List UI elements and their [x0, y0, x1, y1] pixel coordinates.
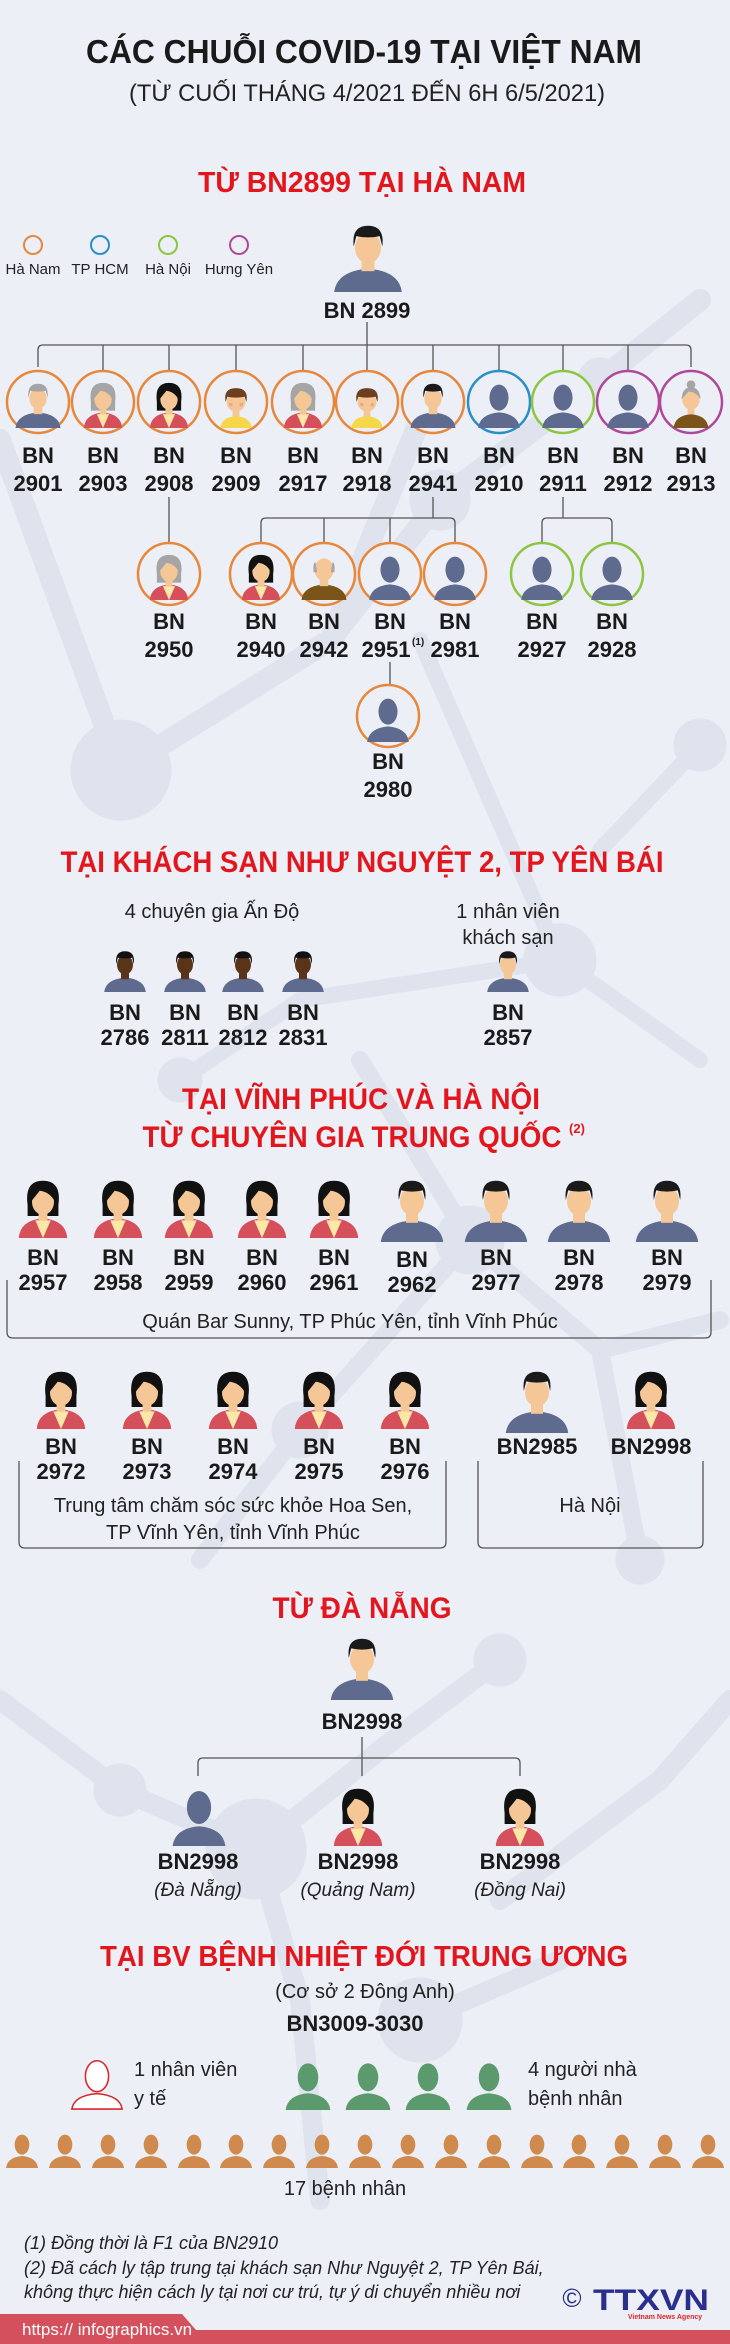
footer bar [0, 2314, 730, 2344]
group: 4 Indian experts: BN [287, 1000, 319, 1025]
row 2 patients: BN [596, 609, 628, 634]
group: Bar Sunny: 2961 [310, 1270, 358, 1295]
row 2 patients: BN [245, 609, 277, 634]
row 2 patients: 2981 [431, 637, 479, 662]
Da Nang contacts: BN2998 [480, 1849, 560, 1874]
logo: TTXVN: TTXVN [593, 2284, 709, 2317]
group: Hoa Sen health center: BN [45, 1434, 77, 1459]
patient relatives [286, 2059, 638, 2110]
row 1 patients: 2917 [279, 471, 327, 496]
row 2 patients: 2940 [237, 637, 285, 662]
group: Bar Sunny: BN [27, 1245, 59, 1270]
group: Bar Sunny: BN [318, 1245, 350, 1270]
group: 4 Indian experts: BN [169, 1000, 201, 1025]
footnotes [24, 2233, 544, 2302]
group: Hoa Sen health center: TP Vĩnh Yên, tỉnh Vĩnh Phúc [106, 1522, 360, 1544]
group: Bar Sunny: 2958 [94, 1270, 142, 1295]
tree lines section 4 [198, 1737, 520, 1776]
group: Bar Sunny: BN [651, 1245, 683, 1270]
group: hotel staff: BN [492, 1000, 524, 1025]
title: CÁC CHUỖI COVID-19 TẠI VIỆT NAM [86, 33, 642, 70]
row 2 patients: BN [439, 609, 471, 634]
Da Nang contacts: BN2998 [158, 1849, 238, 1874]
row 1 patients: BN [547, 443, 579, 468]
logo: TTXVN [562, 2283, 709, 2321]
logo: TTXVN: Vietnam News Agency [628, 2314, 702, 2321]
17 patients [6, 2135, 724, 2200]
row 1 patients: 2913 [667, 471, 715, 496]
row 1 patients: BN [22, 443, 54, 468]
tree lines level 2 [169, 497, 612, 684]
patient BN2980: 2980 [364, 777, 412, 802]
Da Nang contacts: (Đà Nẵng) [154, 1880, 242, 1901]
legend: Hà Nam [5, 261, 61, 278]
row 1 patients: BN [675, 443, 707, 468]
group: Bar Sunny: 2979 [643, 1270, 691, 1295]
group: Bar Sunny [7, 1181, 711, 1338]
row 1 patients: 2918 [343, 471, 391, 496]
row 1 patients: BN [417, 443, 449, 468]
subheading: BN3009-3030 [287, 2011, 423, 2036]
Da Nang contacts: (Quảng Nam) [300, 1880, 416, 1901]
group: hotel staff: 1 nhân viên [456, 901, 560, 923]
legend: TP HCM [71, 261, 129, 278]
row 1 patients: BN [87, 443, 119, 468]
legend: Hưng Yên [205, 261, 273, 278]
row 1 patients [7, 371, 722, 496]
legend [5, 236, 273, 278]
medical staff [72, 2059, 237, 2110]
group: 4 Indian experts: BN [227, 1000, 259, 1025]
footnotes: không thực hiện cách ly tại nơi cư trú, tự ý di chuyển nhiều nơi [24, 2282, 521, 2302]
group: Hoa Sen health center: BN [217, 1434, 249, 1459]
row 2 patients: BN [526, 609, 558, 634]
patient BN2998 Da Nang source: BN2998 [322, 1709, 402, 1734]
group: 4 Indian experts: 4 chuyên gia Ấn Độ [125, 900, 299, 923]
heading: section 3: TỪ CHUYÊN GIA TRUNG QUỐC [142, 1120, 562, 1154]
row 2 patients [138, 543, 643, 662]
tree lines level 1 [38, 322, 691, 371]
group: 4 Indian experts: 2831 [279, 1025, 327, 1050]
group: Hoa Sen health center: 2975 [295, 1459, 343, 1484]
row 2 patients: (1) [412, 637, 424, 648]
footnotes: (2) Đã cách ly tập trung tại khách sạn Như Nguyệt 2, TP Yên Bái, [24, 2258, 544, 2278]
group: Bar Sunny: 2957 [19, 1270, 67, 1295]
heading: section 2: TẠI KHÁCH SẠN NHƯ NGUYỆT 2, TP YÊN BÁI [60, 845, 664, 879]
group: Bar Sunny: 2959 [165, 1270, 213, 1295]
row 1 patients: 2912 [604, 471, 652, 496]
group: Hoa Sen health center: 2974 [209, 1459, 258, 1484]
group: Hoa Sen health center: BN [303, 1434, 335, 1459]
group: Hoa Sen health center: BN [389, 1434, 421, 1459]
group: hotel staff [456, 901, 560, 1050]
group: Bar Sunny: BN [480, 1245, 512, 1270]
group: Ha Noi: BN2998 [611, 1434, 691, 1459]
row 1 patients: BN [287, 443, 319, 468]
group: Ha Noi: BN2985 [497, 1434, 577, 1459]
patient BN2998 Da Nang source [322, 1639, 402, 1734]
patient BN2980 [357, 685, 419, 802]
row 2 patients: 2928 [588, 637, 636, 662]
row 2 patients: 2951 [362, 637, 410, 662]
row 1 patients: 2901 [14, 471, 62, 496]
group: Hoa Sen health center: 2972 [37, 1459, 85, 1484]
subtitle: (TỪ CUỐI THÁNG 4/2021 ĐẾN 6H 6/5/2021) [129, 79, 605, 107]
row 1 patients: 2941 [409, 471, 457, 496]
group: 4 Indian experts: 2811 [161, 1025, 209, 1050]
row 1 patients: 2910 [475, 471, 523, 496]
group: Ha Noi [478, 1372, 703, 1548]
group: Bar Sunny: BN [246, 1245, 278, 1270]
group: Hoa Sen health center: BN [131, 1434, 163, 1459]
group: Hoa Sen health center: 2976 [381, 1459, 429, 1484]
row 1 patients: BN [351, 443, 383, 468]
row 2 patients: 2942 [300, 637, 348, 662]
Da Nang contacts: (Đồng Nai) [474, 1880, 566, 1901]
row 2 patients: 2950 [145, 637, 193, 662]
heading: section 3: (2) [569, 1121, 585, 1136]
row 2 patients: BN [153, 609, 185, 634]
heading: section 5: TẠI BV BỆNH NHIỆT ĐỚI TRUNG ƯƠNG [100, 1939, 628, 1973]
legend: Hà Nội [145, 261, 191, 278]
row 2 patients: BN [308, 609, 340, 634]
logo: TTXVN: © [562, 2283, 582, 2313]
row 1 patients: 2911 [539, 471, 587, 496]
medical staff: 1 nhân viên [134, 2059, 237, 2081]
group: Bar Sunny: BN [102, 1245, 134, 1270]
patient relatives: 4 người nhà [528, 2059, 638, 2081]
group: Bar Sunny: 2977 [472, 1270, 520, 1295]
patient BN2899 [324, 226, 410, 323]
group: Ha Noi: Hà Nội [559, 1495, 621, 1517]
group: Hoa Sen health center: 2973 [123, 1459, 171, 1484]
Da Nang contacts: BN2998 [318, 1849, 398, 1874]
group: Bar Sunny: 2978 [555, 1270, 603, 1295]
group: 4 Indian experts: 2786 [101, 1025, 149, 1050]
row 1 patients: BN [483, 443, 515, 468]
group: Hoa Sen health center [19, 1372, 446, 1548]
row 1 patients: 2908 [145, 471, 193, 496]
group: Bar Sunny: 2962 [388, 1272, 436, 1297]
group: 4 Indian experts [101, 900, 327, 1050]
group: 4 Indian experts: BN [109, 1000, 141, 1025]
heading: section 3: TẠI VĨNH PHÚC VÀ HÀ NỘI [182, 1082, 540, 1116]
group: Bar Sunny: BN [396, 1247, 428, 1272]
subheading [275, 1981, 455, 2036]
group: Bar Sunny: 2960 [238, 1270, 286, 1295]
group: hotel staff: 2857 [484, 1025, 532, 1050]
group: Bar Sunny: Quán Bar Sunny, TP Phúc Yên, tỉnh Vĩnh Phúc [142, 1311, 558, 1333]
row 1 patients: BN [153, 443, 185, 468]
group: 4 Indian experts: 2812 [219, 1025, 267, 1050]
footer bar: https:// infographics.vn [22, 2320, 192, 2339]
row 1 patients: 2903 [79, 471, 127, 496]
heading: section 4: TỪ ĐÀ NẴNG [272, 1590, 452, 1625]
group: Hoa Sen health center: Trung tâm chăm sóc sức khỏe Hoa Sen, [54, 1495, 412, 1517]
patient relatives: bệnh nhân [528, 2088, 623, 2110]
patient BN2899: BN 2899 [324, 298, 410, 323]
heading: section 1: TỪ BN2899 TẠI HÀ NAM [198, 165, 526, 199]
medical staff: y tế [134, 2088, 166, 2110]
group: Bar Sunny: BN [563, 1245, 595, 1270]
subheading: (Cơ sở 2 Đông Anh) [275, 1981, 455, 2003]
patient BN2980: BN [372, 749, 404, 774]
heading: section 3 [142, 1082, 585, 1154]
17 patients: 17 bệnh nhân [284, 2178, 406, 2200]
footnotes: (1) Đồng thời là F1 của BN2910 [24, 2233, 278, 2253]
group: Bar Sunny: BN [173, 1245, 205, 1270]
group: hotel staff: khách sạn [462, 927, 554, 949]
row 2 patients: 2927 [518, 637, 566, 662]
row 2 patients: BN [374, 609, 406, 634]
row 1 patients: BN [220, 443, 252, 468]
row 1 patients: 2909 [212, 471, 260, 496]
row 1 patients: BN [612, 443, 644, 468]
Da Nang contacts [154, 1789, 566, 1901]
